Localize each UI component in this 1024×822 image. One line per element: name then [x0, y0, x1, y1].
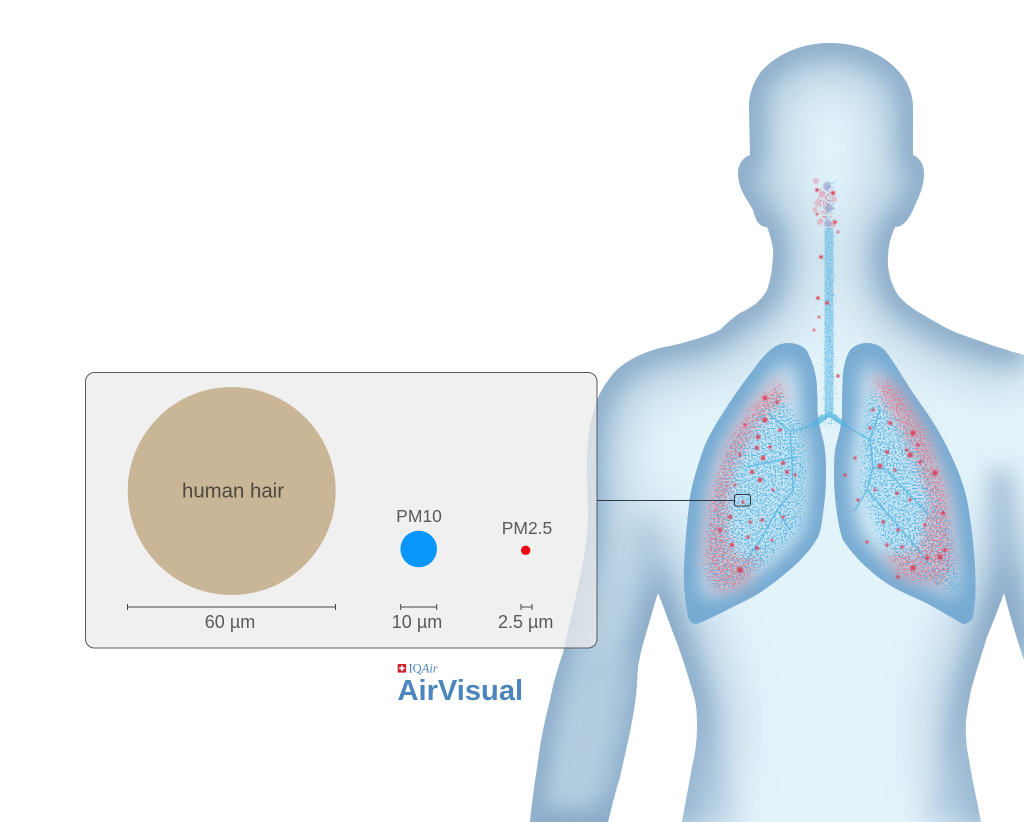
callout line and box on lung [597, 494, 750, 506]
throat particles [812, 178, 840, 378]
particles: larger red PM2.5 clusters [718, 396, 947, 579]
PM10 particle [400, 531, 437, 567]
10 micron scale bar [401, 604, 437, 610]
particles: blue PM10 speckle in airways and lungs [700, 174, 965, 600]
particle haze in lungs [700, 372, 958, 596]
10 micron label: 10 µm [392, 612, 442, 632]
PM10 label: PM10 [396, 506, 442, 526]
human body silhouette [525, 43, 1024, 822]
2.5 micron label: 2.5 µm [498, 612, 553, 632]
60 micron scale bar [128, 604, 336, 610]
panel: size comparison [86, 372, 597, 648]
PM2.5 label: PM2.5 [502, 518, 552, 538]
particles: red speckle in outer lung [700, 179, 958, 596]
IQAir wordmark: IQAir [408, 662, 438, 676]
human hair label: human hair [182, 480, 284, 502]
logo: IQAir AirVisual [398, 662, 523, 707]
60 micron label: 60 µm [205, 612, 255, 632]
PM2.5 particle [521, 546, 530, 555]
airway branches [747, 232, 930, 565]
human hair circle [128, 387, 336, 595]
icon: swiss cross [398, 664, 406, 673]
right lung [834, 343, 976, 624]
left lung [684, 343, 826, 624]
2.5 micron scale bar [521, 604, 532, 610]
AirVisual wordmark: AirVisual [398, 675, 523, 707]
